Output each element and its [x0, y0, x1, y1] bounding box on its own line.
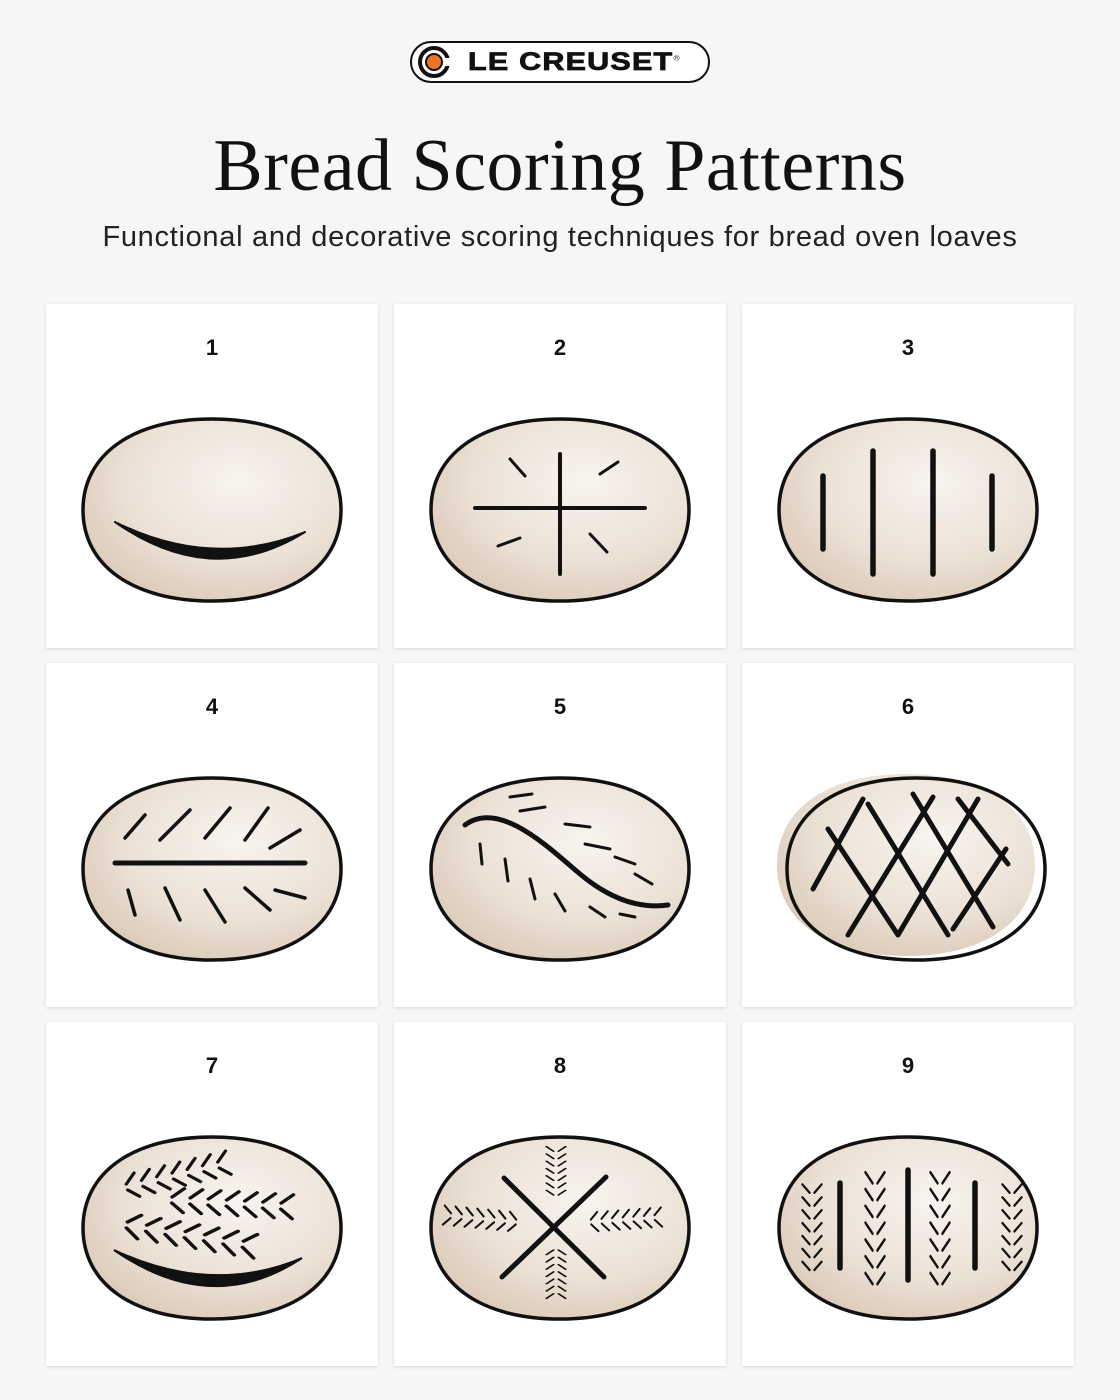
icon: logo mark	[418, 46, 450, 78]
subtitle: Functional and decorative scoring techniques for bread oven loaves	[102, 221, 1018, 253]
panel: 6: 6	[902, 694, 914, 719]
panel: 5: 5	[554, 694, 566, 719]
panel: 3	[742, 304, 1074, 648]
title: Bread Scoring Patterns	[213, 125, 907, 207]
panel: 8: 8	[554, 1053, 566, 1078]
panel: 4: 4	[206, 694, 218, 719]
logo text: LE CREUSET®	[468, 48, 681, 76]
panel: 7	[46, 1022, 378, 1366]
panel: 4	[46, 663, 378, 1007]
panel: 5	[394, 663, 726, 1007]
logo	[410, 41, 710, 83]
panel: 8	[394, 1022, 726, 1366]
panel: 7: 7	[206, 1053, 218, 1078]
panel: 9	[742, 1022, 1074, 1366]
panel: 2	[394, 304, 726, 648]
panel: 1: 1	[206, 335, 218, 360]
panel: 9: 9	[902, 1053, 914, 1078]
panel: 6	[742, 663, 1074, 1007]
panel: 3: 3	[902, 335, 914, 360]
panel: 2: 2	[554, 335, 566, 360]
panel: 1	[46, 304, 378, 648]
